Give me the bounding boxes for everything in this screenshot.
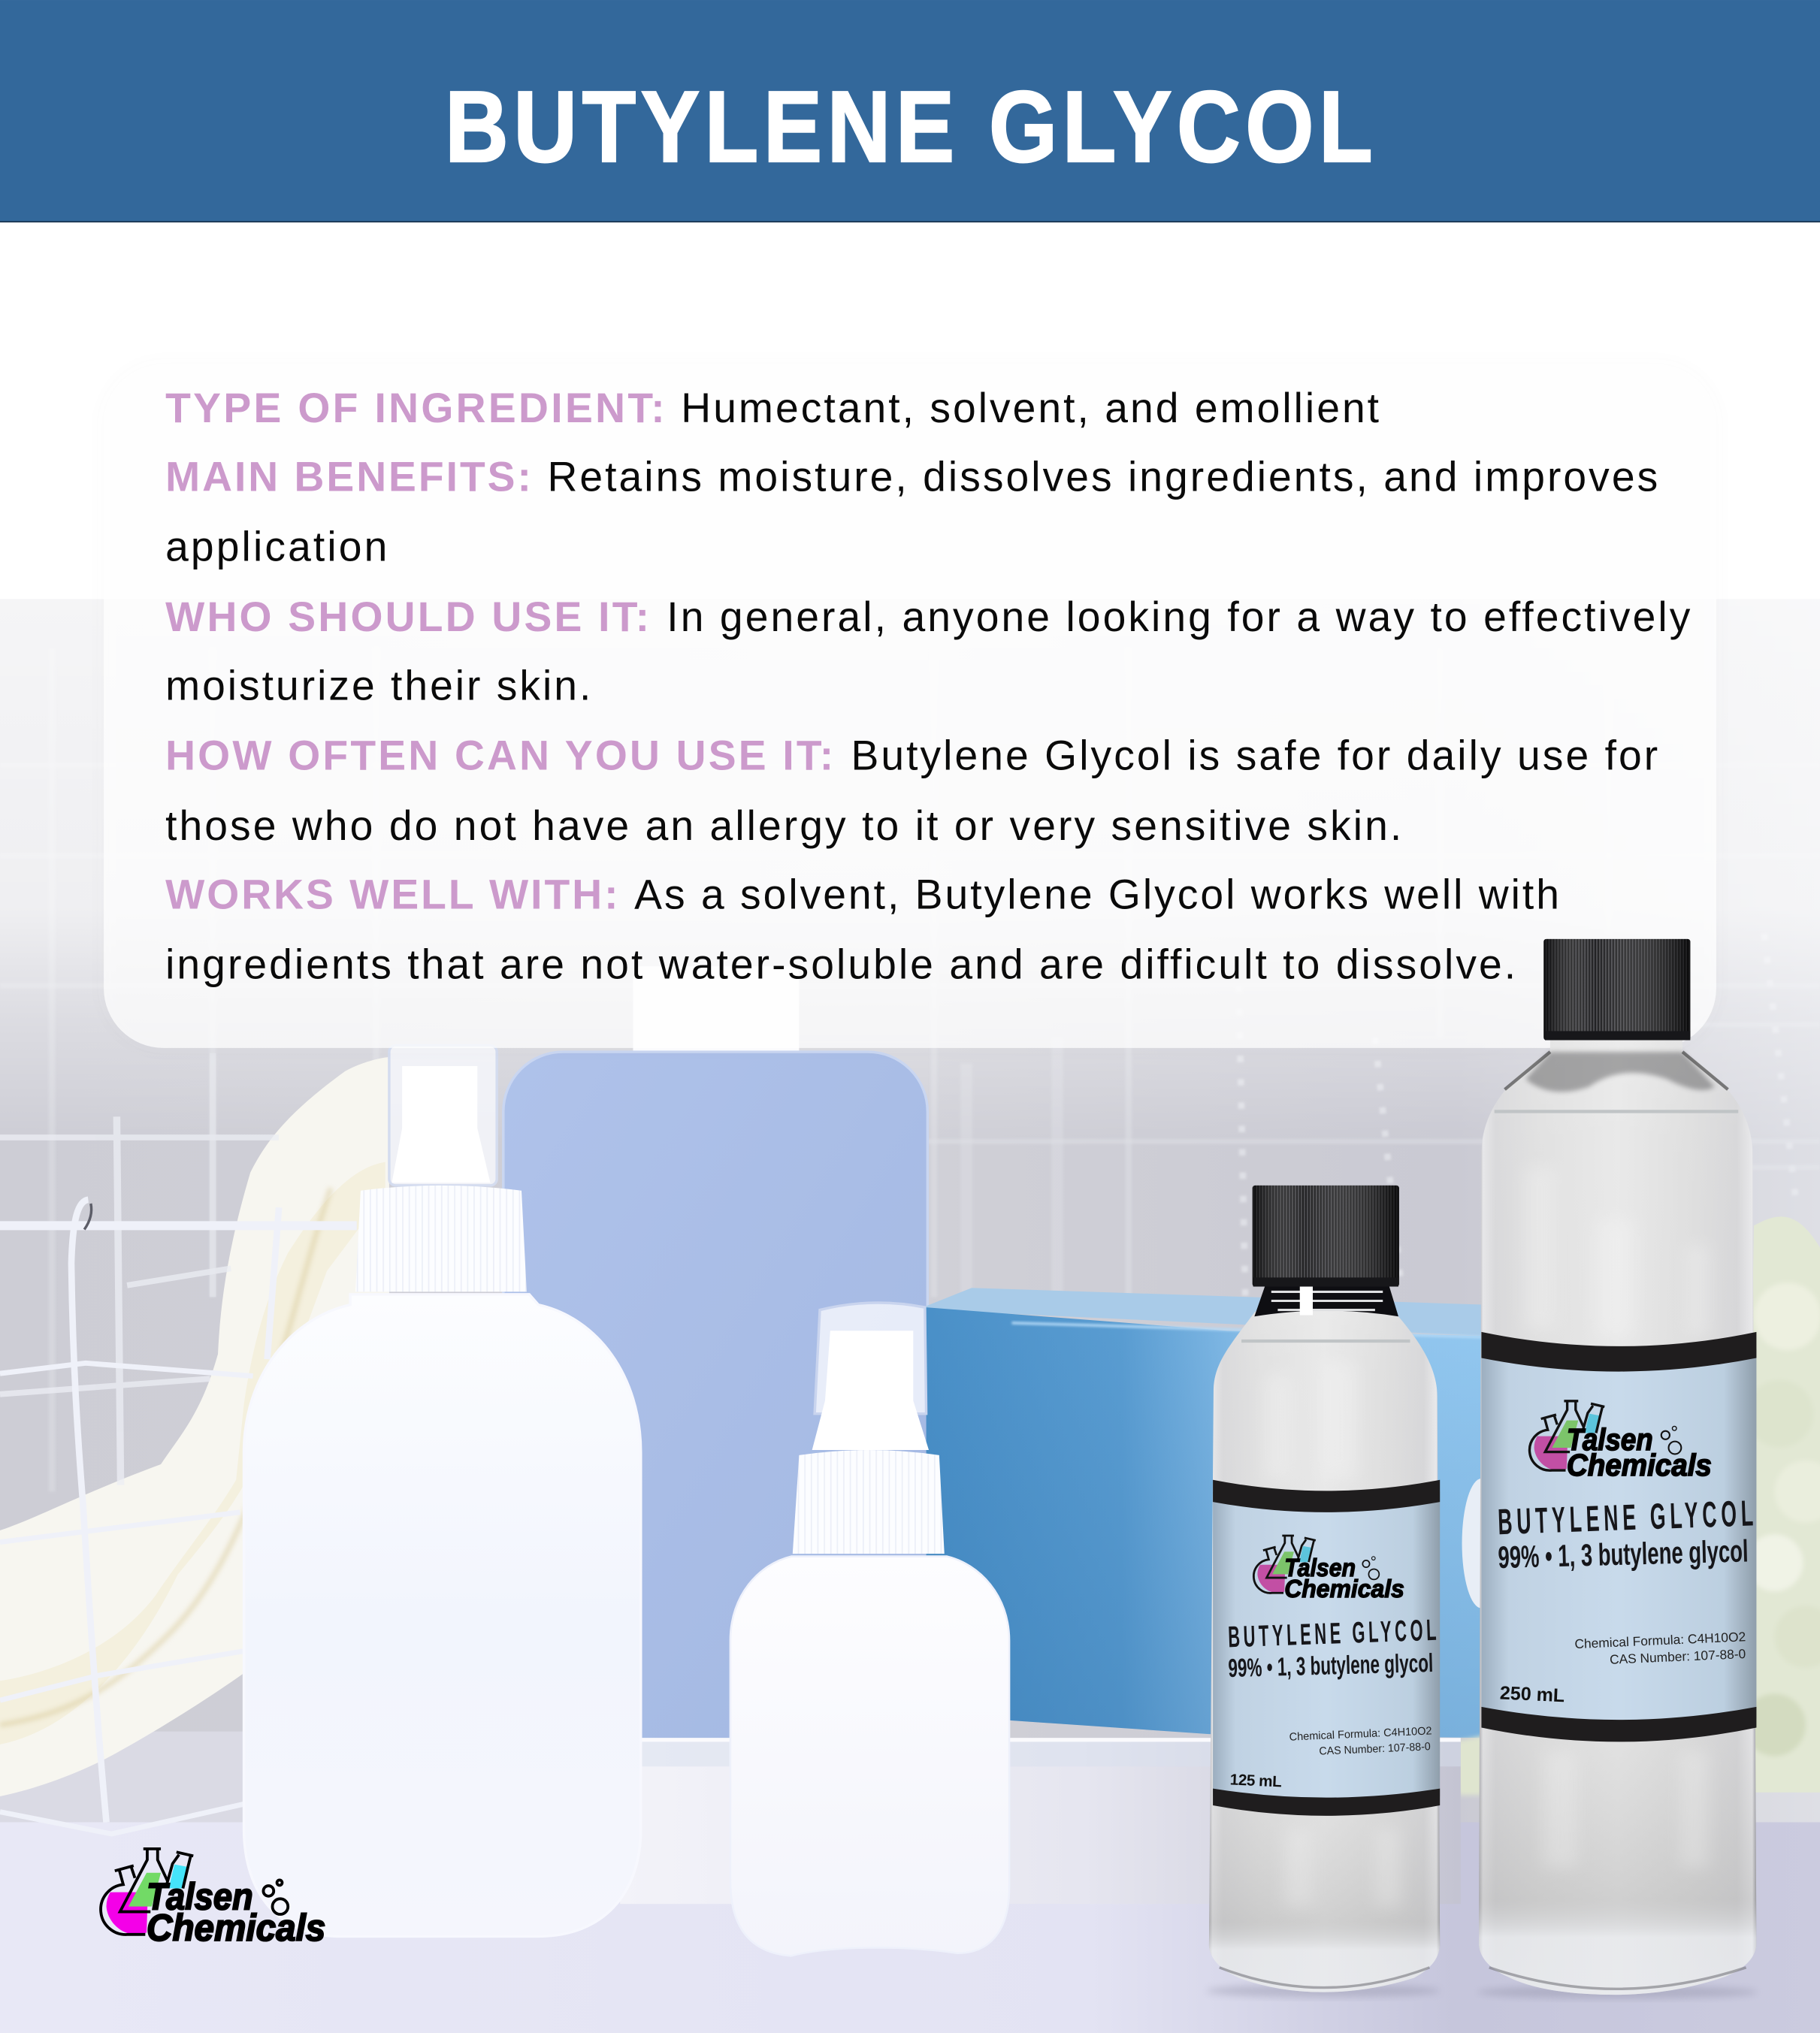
panel shadow bbox=[104, 364, 1716, 1048]
small white spray bottle bbox=[730, 1303, 1009, 1956]
pump bbox=[812, 1331, 929, 1450]
panel: ingredient facts bbox=[104, 364, 1716, 1048]
main benefits bbox=[165, 453, 1658, 570]
cap bbox=[1253, 1186, 1399, 1287]
wire basket bbox=[0, 1053, 357, 1834]
green sponge bbox=[1443, 1216, 1820, 1795]
blue bottle bbox=[503, 1052, 927, 1752]
ribbed cap bbox=[355, 1186, 527, 1291]
bottle body bbox=[730, 1557, 1009, 1956]
label logo bbox=[1529, 1401, 1712, 1482]
blue bottle cap bbox=[633, 966, 799, 1059]
main benefits: Retains moisture, dissolves ingredients, and improves bbox=[547, 453, 1658, 500]
floor shadow bbox=[1206, 1984, 1440, 1998]
type of ingredient bbox=[165, 385, 1379, 431]
who should use it: moisturize their skin. bbox=[165, 662, 591, 708]
label logo: Chemicals bbox=[1284, 1575, 1404, 1603]
product bottle: 250 mL bbox=[1477, 939, 1758, 1998]
header band bbox=[0, 0, 1820, 222]
how often can you use it: those who do not have an allergy to it or very sensitive skin. bbox=[165, 802, 1401, 849]
label name: BUTYLENE GLYCOL bbox=[1497, 1494, 1754, 1542]
basket floor bbox=[0, 1732, 246, 1825]
who should use it bbox=[165, 594, 1691, 708]
title: BUTYLENE GLYCOL bbox=[445, 70, 1373, 183]
main benefits: application bbox=[165, 524, 387, 570]
wall and curtain bbox=[0, 600, 1820, 1844]
label volume: 250 mL bbox=[1499, 1682, 1565, 1706]
logo: Talsen Chemicals bbox=[101, 1849, 325, 1949]
main benefits: MAIN BENEFITS: bbox=[165, 453, 531, 500]
logo: Talsen Chemicals: Chemicals bbox=[147, 1907, 325, 1949]
label volume: 125 mL bbox=[1229, 1771, 1283, 1790]
table surface bbox=[0, 1822, 1820, 2033]
background photo bbox=[0, 600, 1820, 2033]
label bands bbox=[1213, 1480, 1440, 1816]
label logo: Chemicals bbox=[1567, 1448, 1712, 1482]
overcap bbox=[815, 1303, 927, 1414]
type of ingredient: Humectant, solvent, and emollient bbox=[681, 385, 1379, 431]
label formula: Chemical Formula: C4H10O2 bbox=[1574, 1629, 1746, 1651]
label bands bbox=[1481, 1332, 1756, 1741]
label bbox=[1213, 1480, 1440, 1816]
label formula: Chemical Formula: C4H10O2 bbox=[1289, 1725, 1432, 1744]
how often can you use it: HOW OFTEN CAN YOU USE IT: bbox=[165, 733, 833, 779]
floor shadow bbox=[1477, 1986, 1758, 1998]
bottle streaks bbox=[1524, 1168, 1710, 1868]
label logo: Talsen bbox=[1284, 1554, 1356, 1582]
logo: Talsen Chemicals: Talsen bbox=[147, 1876, 253, 1918]
works well with bbox=[165, 871, 1559, 988]
large white spray bottle bbox=[244, 1045, 641, 1936]
works well with: ingredients that are not water-soluble and are difficult to dissolve. bbox=[165, 941, 1516, 988]
towel bbox=[0, 1057, 389, 1796]
overcap bbox=[389, 1045, 497, 1186]
who should use it: WHO SHOULD USE IT: bbox=[165, 594, 649, 640]
blue box bbox=[927, 1288, 1486, 1738]
neck bbox=[1254, 1287, 1398, 1316]
panel card bbox=[104, 364, 1716, 1048]
box knob bbox=[1462, 1479, 1501, 1609]
label logo bbox=[1253, 1536, 1404, 1603]
how often can you use it: Butylene Glycol is safe for daily use for bbox=[851, 733, 1658, 779]
how often can you use it bbox=[165, 733, 1658, 849]
product bottle: 125 mL bbox=[1206, 1186, 1440, 1998]
white platform bbox=[620, 1738, 1461, 1904]
label bbox=[1481, 1332, 1756, 1741]
bottle body bbox=[244, 1294, 641, 1936]
shoulder reflections bbox=[1489, 1052, 1746, 1989]
label CAS: CAS Number: 107-88-0 bbox=[1319, 1741, 1431, 1758]
type of ingredient: TYPE OF INGREDIENT: bbox=[165, 385, 665, 431]
label logo: Talsen bbox=[1567, 1422, 1653, 1457]
ribbed cap bbox=[793, 1450, 945, 1554]
bottle streaks bbox=[1265, 1362, 1401, 1907]
label CAS: CAS Number: 107-88-0 bbox=[1610, 1646, 1746, 1667]
who should use it: In general, anyone looking for a way to effectively bbox=[667, 594, 1691, 640]
towel fold bbox=[0, 1162, 385, 1745]
works well with: WORKS WELL WITH: bbox=[165, 871, 618, 917]
fade overlay bbox=[0, 600, 1820, 1141]
bottle body bbox=[1479, 1041, 1756, 1995]
cap bbox=[1543, 939, 1690, 1041]
works well with: As a solvent, Butylene Glycol works well with bbox=[634, 871, 1559, 917]
label strength: 99% • 1, 3 butylene glycol bbox=[1228, 1649, 1434, 1683]
pump bbox=[392, 1066, 491, 1183]
bottle body bbox=[1209, 1287, 1440, 1992]
label name: BUTYLENE GLYCOL bbox=[1228, 1613, 1437, 1654]
